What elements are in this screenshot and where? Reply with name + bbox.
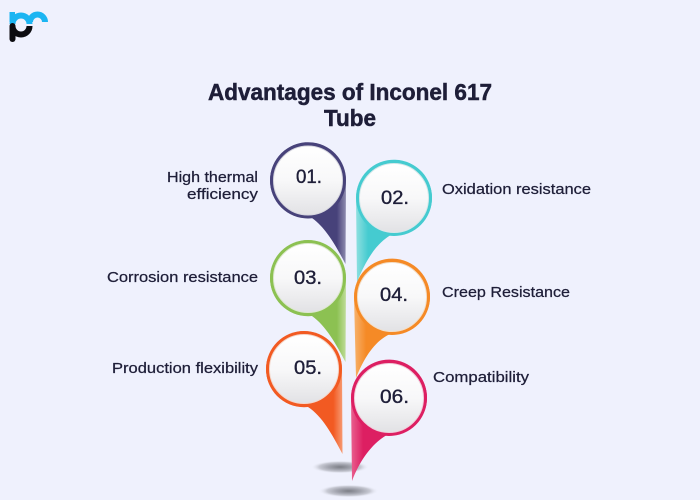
label: high thermal efficiency: High thermal <box>167 169 258 186</box>
title <box>208 79 492 131</box>
pin 02: 02. <box>381 188 409 209</box>
label: production flexibility: Production flexibility <box>112 360 259 377</box>
label: creep resistance: Creep Resistance <box>442 284 570 301</box>
pin 06: 06. <box>380 387 409 408</box>
label: high thermal efficiency: efficiency <box>187 186 259 203</box>
ground shadow: pin 06 <box>318 484 378 498</box>
label: corrosion resistance: Corrosion resistance <box>107 269 258 286</box>
pin 01 <box>270 142 346 264</box>
pin 02 <box>356 160 432 282</box>
pin 05: 05. <box>294 358 322 379</box>
label: oxidation resistance: Oxidation resistance <box>442 181 591 198</box>
pin 04 <box>354 259 430 378</box>
pin 06 <box>351 360 427 481</box>
title: Tube <box>324 105 376 131</box>
pin 05 <box>266 331 342 454</box>
title: Advantages of Inconel 617 <box>208 79 492 105</box>
label: compatibility: Compatibility <box>433 369 530 386</box>
logo <box>10 12 45 39</box>
pin 03: 03. <box>294 268 322 289</box>
ground shadow: pin 05 <box>311 460 369 474</box>
label: high thermal efficiency <box>167 169 259 203</box>
pin 01: 01. <box>296 167 322 188</box>
pin 03 <box>270 240 346 362</box>
pin 04: 04. <box>380 285 408 306</box>
